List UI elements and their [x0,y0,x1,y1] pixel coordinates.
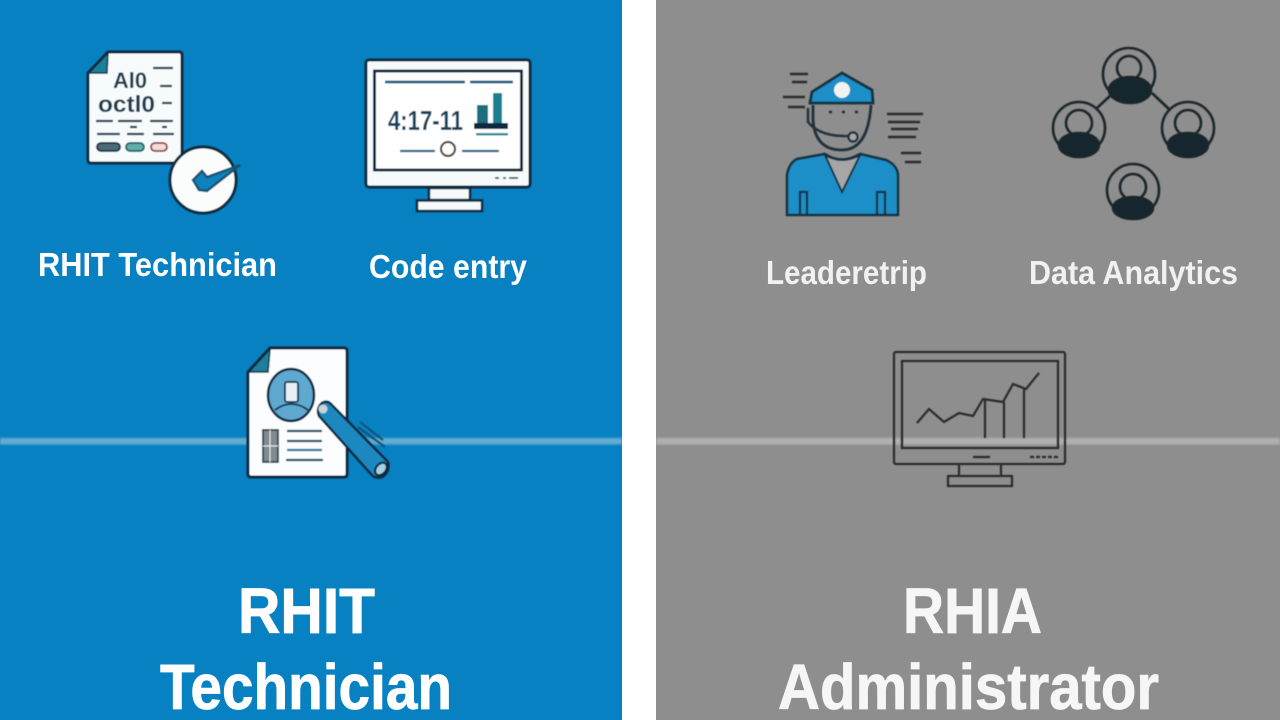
heading: RHIA Administrator [778,575,1159,720]
label: RHIT Technician: RHIT Technician [38,246,277,283]
panel: RHIT technician [0,0,622,720]
heading: RHIT Technician [160,575,452,720]
icon: code document with check: Al0 [113,68,147,93]
icon: code document with check [88,52,240,213]
icon: monitor with code entry [366,60,530,211]
label: Data Analytics: Data Analytics [1029,254,1238,291]
icon: analytics monitor [894,352,1065,486]
icon: code document with check: octl0 [98,91,155,117]
heading: RHIA Administrator: RHIA [903,575,1042,647]
panel: RHIA administrator [656,0,1280,720]
label: Code entry: Code entry [369,248,528,285]
label: Leadership: Leaderetrip [766,254,927,291]
icon: profile document with pencil [248,348,389,478]
heading: RHIT Technician: RHIT [238,575,375,647]
icon: team network [1053,48,1214,219]
icon: monitor with code entry: 4:17-11 [388,105,463,136]
icon: leader with headset [783,73,923,215]
